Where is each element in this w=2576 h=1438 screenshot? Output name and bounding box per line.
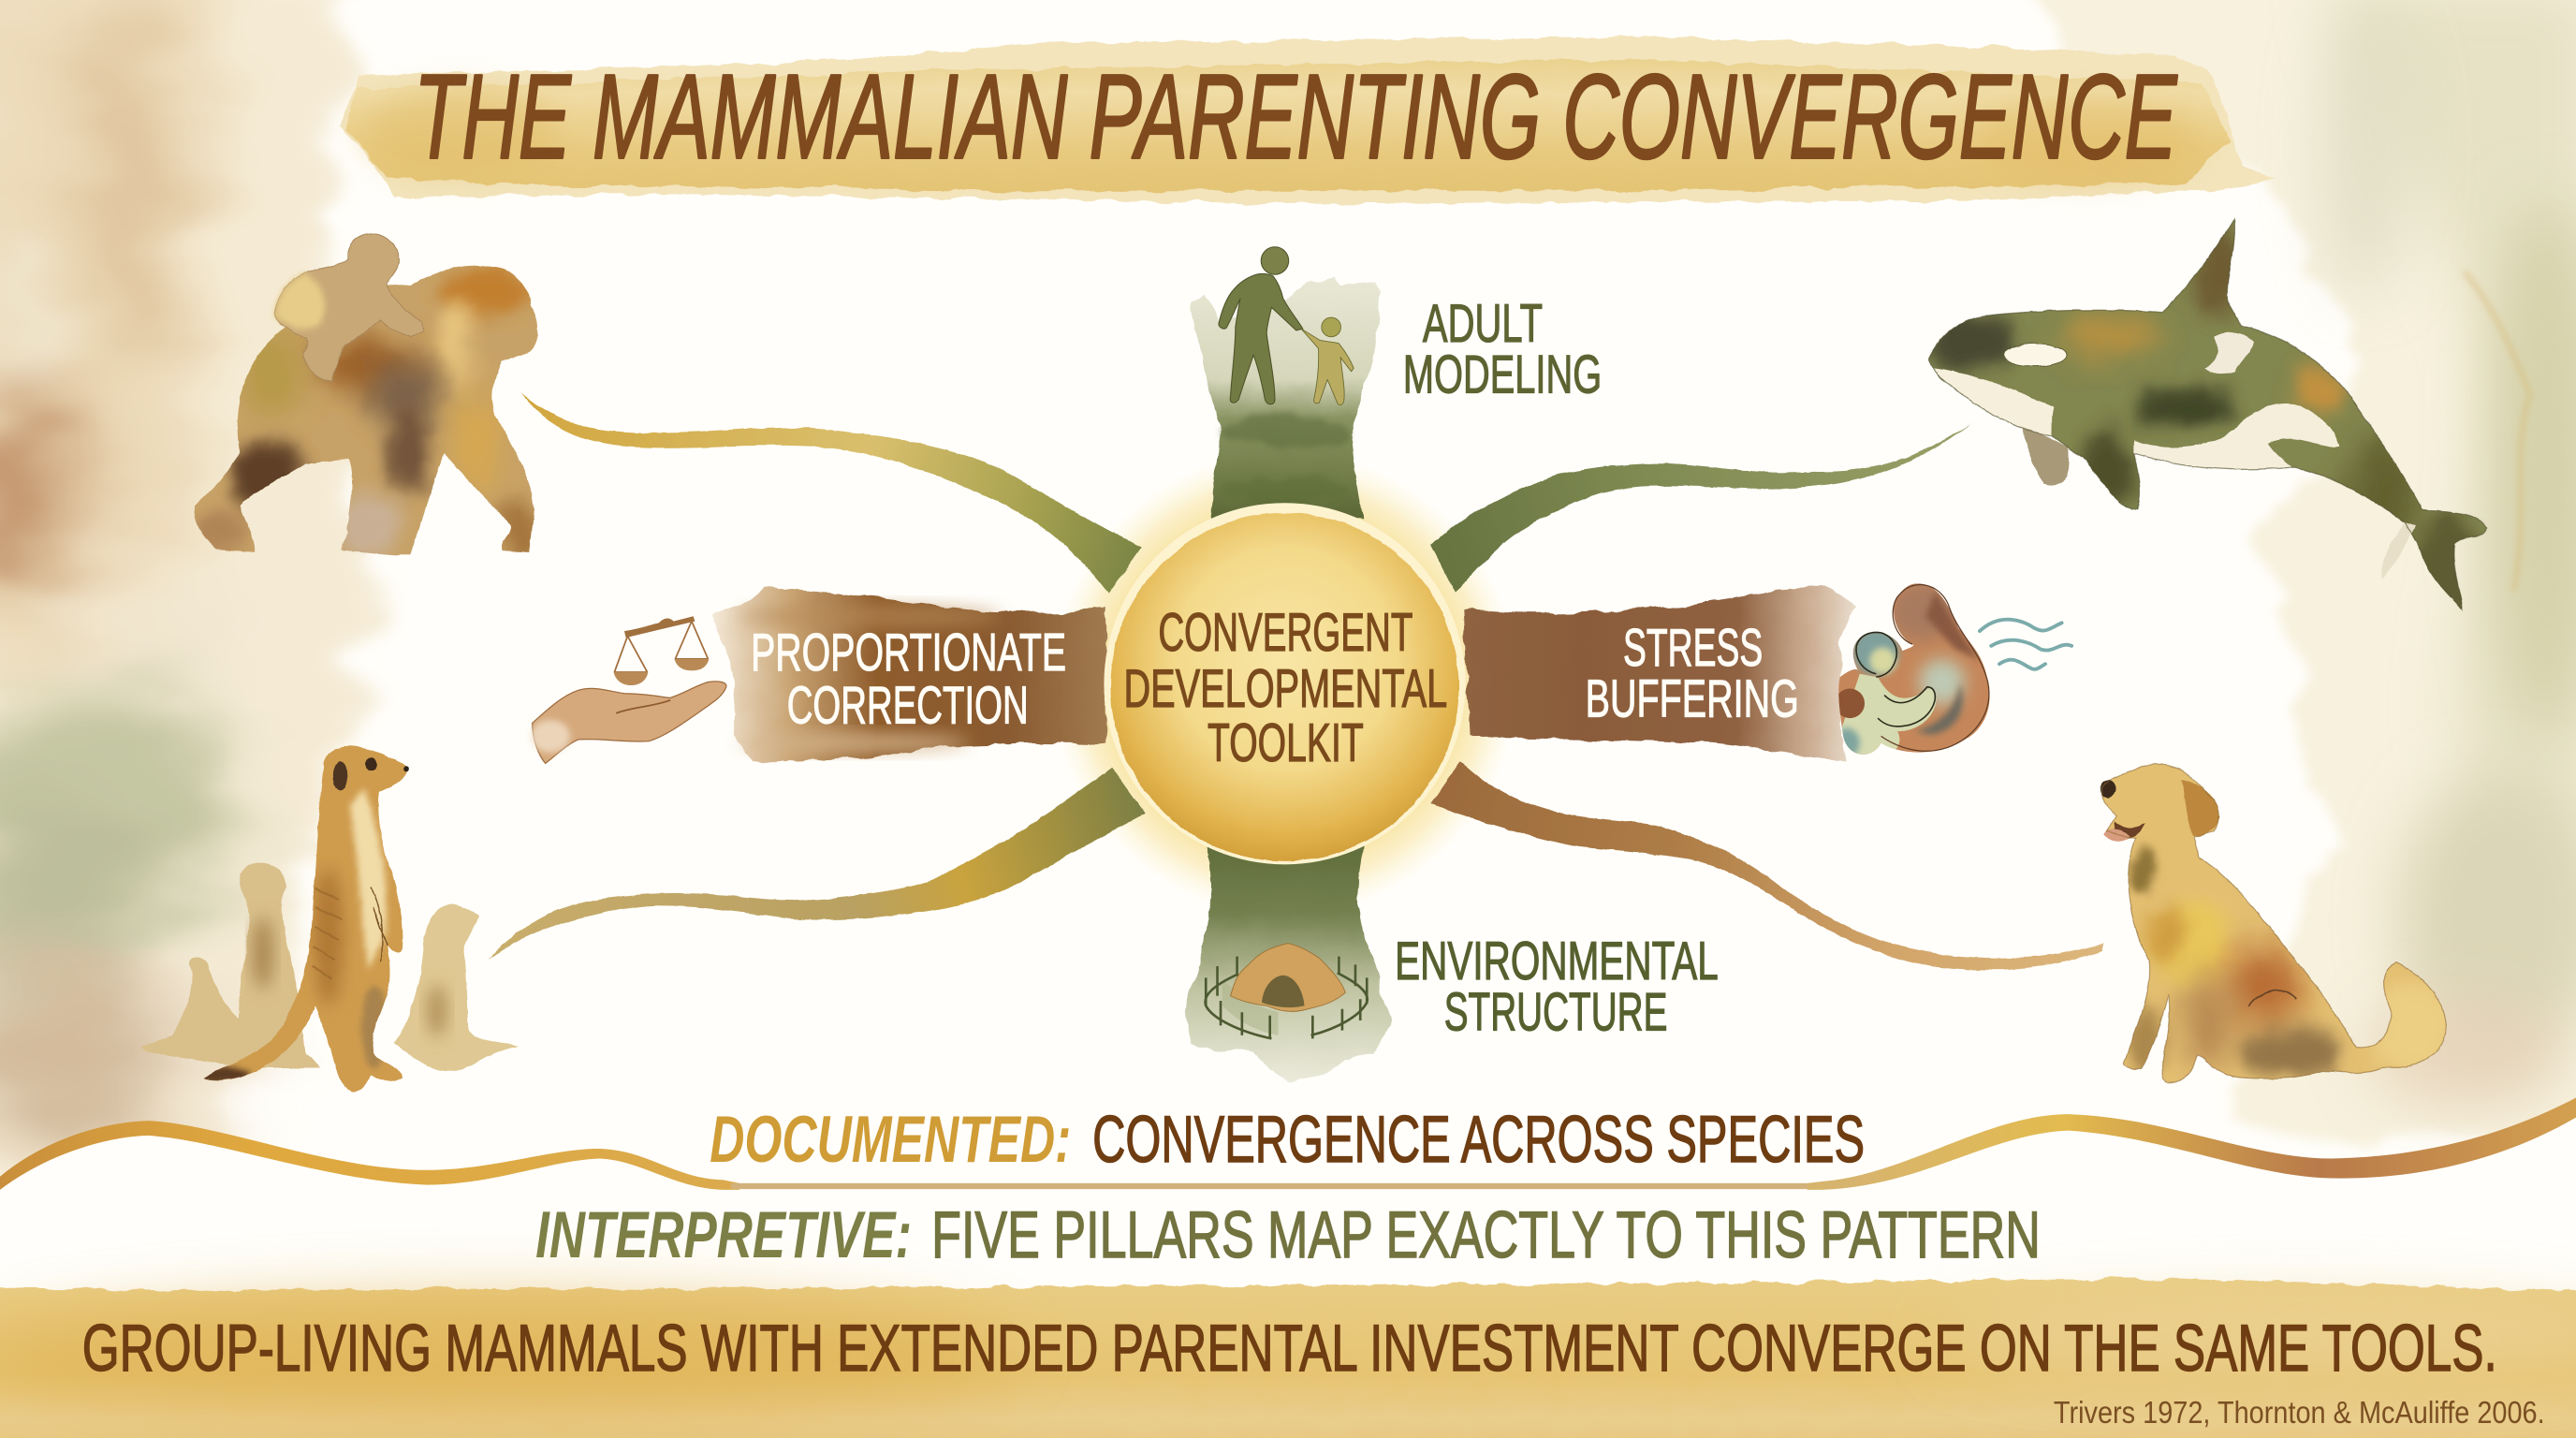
label: adult modeling	[1403, 294, 1602, 405]
meerkat companions	[141, 863, 320, 1068]
connector: dog to toolkit	[1431, 761, 2104, 970]
main meerkat	[204, 745, 409, 1092]
interpretive line: INTERPRETIVE:	[535, 1197, 912, 1271]
icon: hand holding scales	[531, 616, 726, 763]
decorative wave divider	[0, 1098, 2576, 1190]
interpretive line: FIVE PILLARS MAP EXACTLY TO THIS PATTERN	[931, 1197, 2041, 1271]
label: stress buffering	[1586, 618, 1799, 727]
label: proportionate correction: PROPORTIONATE	[751, 623, 1066, 682]
halo around toolkit circle	[1051, 450, 1518, 917]
banner: stress buffering	[1464, 575, 2071, 764]
icon: adult and child holding hands	[1219, 247, 1354, 405]
label: convergent developmental toolkit	[1123, 603, 1447, 773]
label: adult modeling: MODELING	[1403, 345, 1602, 405]
infant on back	[274, 233, 424, 381]
label: convergent developmental toolkit: DEVELOPMENTAL	[1123, 659, 1447, 719]
icon: hut with fence	[1206, 944, 1368, 1038]
label: stress buffering: BUFFERING	[1586, 668, 1799, 727]
documented line	[710, 1102, 1865, 1176]
animal: golden dog	[2095, 756, 2456, 1093]
connector: ape to toolkit	[520, 393, 1142, 594]
label: stress buffering: STRESS	[1623, 618, 1763, 677]
label: environmental structure: ENVIRONMENTAL	[1395, 932, 1719, 991]
label: convergent developmental toolkit: TOOLKIT	[1208, 713, 1364, 773]
interpretive line	[535, 1197, 2041, 1271]
label: adult modeling: ADULT	[1423, 294, 1543, 354]
label: proportionate correction: CORRECTION	[787, 675, 1029, 734]
clean paper below the wave	[0, 1105, 2576, 1314]
animal: ape carrying infant	[195, 233, 538, 556]
animal: meerkat group	[141, 740, 520, 1101]
left watercolor wash	[0, 0, 394, 1199]
bottom takeaway band	[0, 1279, 2576, 1438]
label: proportionate correction	[751, 623, 1066, 734]
connector: meerkats to toolkit	[488, 768, 1145, 960]
icon: parent embracing child	[1838, 583, 2074, 755]
dog ear	[2182, 779, 2219, 836]
banner: proportionate correction	[531, 587, 1105, 763]
animal: orca	[1922, 213, 2497, 624]
pale far flipper	[2023, 424, 2069, 486]
label: environmental structure: STRUCTURE	[1444, 983, 1667, 1043]
central toolkit circle	[1104, 503, 1466, 864]
icon: calming waves	[1980, 620, 2071, 669]
label: convergent developmental toolkit: CONVERGENT	[1158, 603, 1412, 663]
documented line: CONVERGENCE ACROSS SPECIES	[1092, 1102, 1865, 1176]
documented line: DOCUMENTED:	[710, 1102, 1071, 1176]
right watercolor wash	[2011, 0, 2576, 1148]
pillar bottom: environmental structure	[1184, 842, 1719, 1081]
connector: orca to toolkit	[1431, 422, 1971, 594]
pillar top: adult modeling	[1190, 247, 1602, 520]
title banner	[342, 37, 2276, 204]
label: environmental structure	[1395, 932, 1719, 1043]
